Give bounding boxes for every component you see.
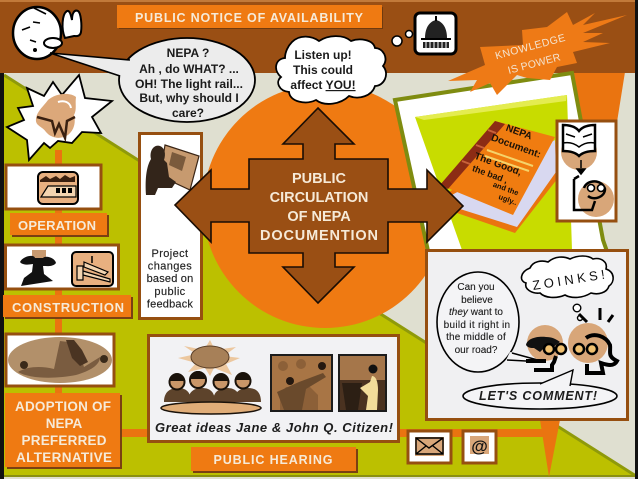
thought cloud: listen up [276, 27, 420, 104]
heading: public notice of availability: PUBLIC NOTICE OF AVAILABILITY [135, 11, 364, 25]
speech bubble: NEPA: OH! The light rail... [135, 77, 243, 91]
panel: adoption of NEPA preferred alternative [5, 334, 122, 469]
panel: project changes: changes [148, 260, 192, 272]
icon: brainstorm table [161, 340, 261, 414]
arrow cross: PUBLIC [292, 171, 347, 187]
arrow cross: CIRCULATION [270, 190, 368, 206]
image: speaker at podium [339, 355, 386, 411]
thought cloud: zoinks: ZOINKS! [531, 266, 609, 293]
speech bubble: NEPA: Ah , do WHAT? ... [139, 62, 239, 76]
document frame [395, 73, 610, 260]
icon: at sign: @ [471, 437, 488, 456]
orange connectors [55, 72, 625, 477]
icon box: read and think [557, 121, 616, 221]
speech bubble: can you believe: the middle of [446, 332, 506, 343]
star callout: knowledge is power [448, 12, 627, 95]
speech bubble: can you believe: Can you [457, 282, 495, 293]
panel: operation [6, 165, 109, 237]
panel: project changes: Project [151, 248, 189, 260]
thought cloud: listen up: This could [293, 63, 353, 77]
thought cloud: zoinks [521, 256, 613, 320]
speech bubble: NEPA [50, 38, 255, 122]
header band [0, 0, 635, 73]
icon: two heads [526, 308, 617, 373]
star callout: knowledge is power: IS POWER [507, 51, 562, 77]
star callout: knowledge is power: KNOWLEDGE [494, 32, 567, 62]
explosion icon [7, 75, 112, 160]
panel: adoption of NEPA preferred alternative: ADOPTION OF [15, 399, 111, 414]
speech bubble: can you believe: they want to [449, 307, 503, 318]
arrow cross [175, 108, 463, 303]
panel: project changes: feedback [147, 298, 193, 310]
heading: public notice of availability [117, 5, 383, 29]
panel: project changes: based on [147, 273, 193, 285]
speech bubble: NEPA: care? [172, 106, 204, 120]
arrow cross: OF NEPA [287, 209, 351, 225]
speech bubble: let's comment: LET'S COMMENT! [479, 389, 597, 403]
book: NEPA document: NEPA [504, 123, 533, 142]
speech bubble: can you believe: build it right in [444, 320, 510, 331]
arrow cross: DOCUMENTION [260, 228, 378, 244]
label: public hearing: PUBLIC HEARING [214, 453, 332, 467]
panel: project changes [140, 134, 202, 318]
book: NEPA document: the bad , [471, 163, 509, 185]
speech bubble: can you believe [437, 272, 545, 372]
panel: adoption of NEPA preferred alternative: PREFERRED [22, 433, 107, 448]
panel: construction [3, 245, 133, 319]
icon: at sign [463, 431, 496, 463]
book: NEPA document: ugly.. [497, 192, 518, 207]
speech bubble: can you believe: believe [461, 295, 493, 306]
icon: thinking face with hand [13, 7, 81, 59]
panel: adoption of NEPA preferred alternative: NEPA [46, 416, 82, 431]
orange circle [203, 84, 447, 328]
panel: construction: CONSTRUCTION [12, 300, 124, 315]
speech bubble: let's comment [463, 370, 617, 409]
thought cloud: listen up: affect YOU! [290, 78, 356, 92]
panel: operation: OPERATION [18, 218, 96, 233]
panel: public hearing [148, 336, 398, 442]
book: NEPA document: The Good, [473, 151, 523, 178]
icon: envelope [408, 431, 451, 463]
speech bubble: NEPA: But, why should I [139, 91, 239, 105]
image: audience [271, 355, 332, 411]
book: NEPA document: Document: [489, 133, 542, 161]
speech bubble: NEPA: NEPA ? [167, 46, 209, 60]
label: public hearing [191, 447, 358, 473]
panel: public hearing: Great ideas Jane & John Q. Citizen! [155, 420, 394, 435]
thought cloud: listen up: Listen up! [294, 48, 352, 62]
panel: adoption of NEPA preferred alternative: ALTERNATIVE [16, 450, 112, 465]
book: NEPA document: and the [492, 180, 520, 197]
icon: capitol building [415, 13, 456, 54]
panel: project changes: public [154, 286, 186, 298]
book: NEPA document [440, 121, 558, 233]
panel: let's comment [426, 250, 628, 420]
speech bubble: can you believe: our road? [455, 345, 498, 356]
